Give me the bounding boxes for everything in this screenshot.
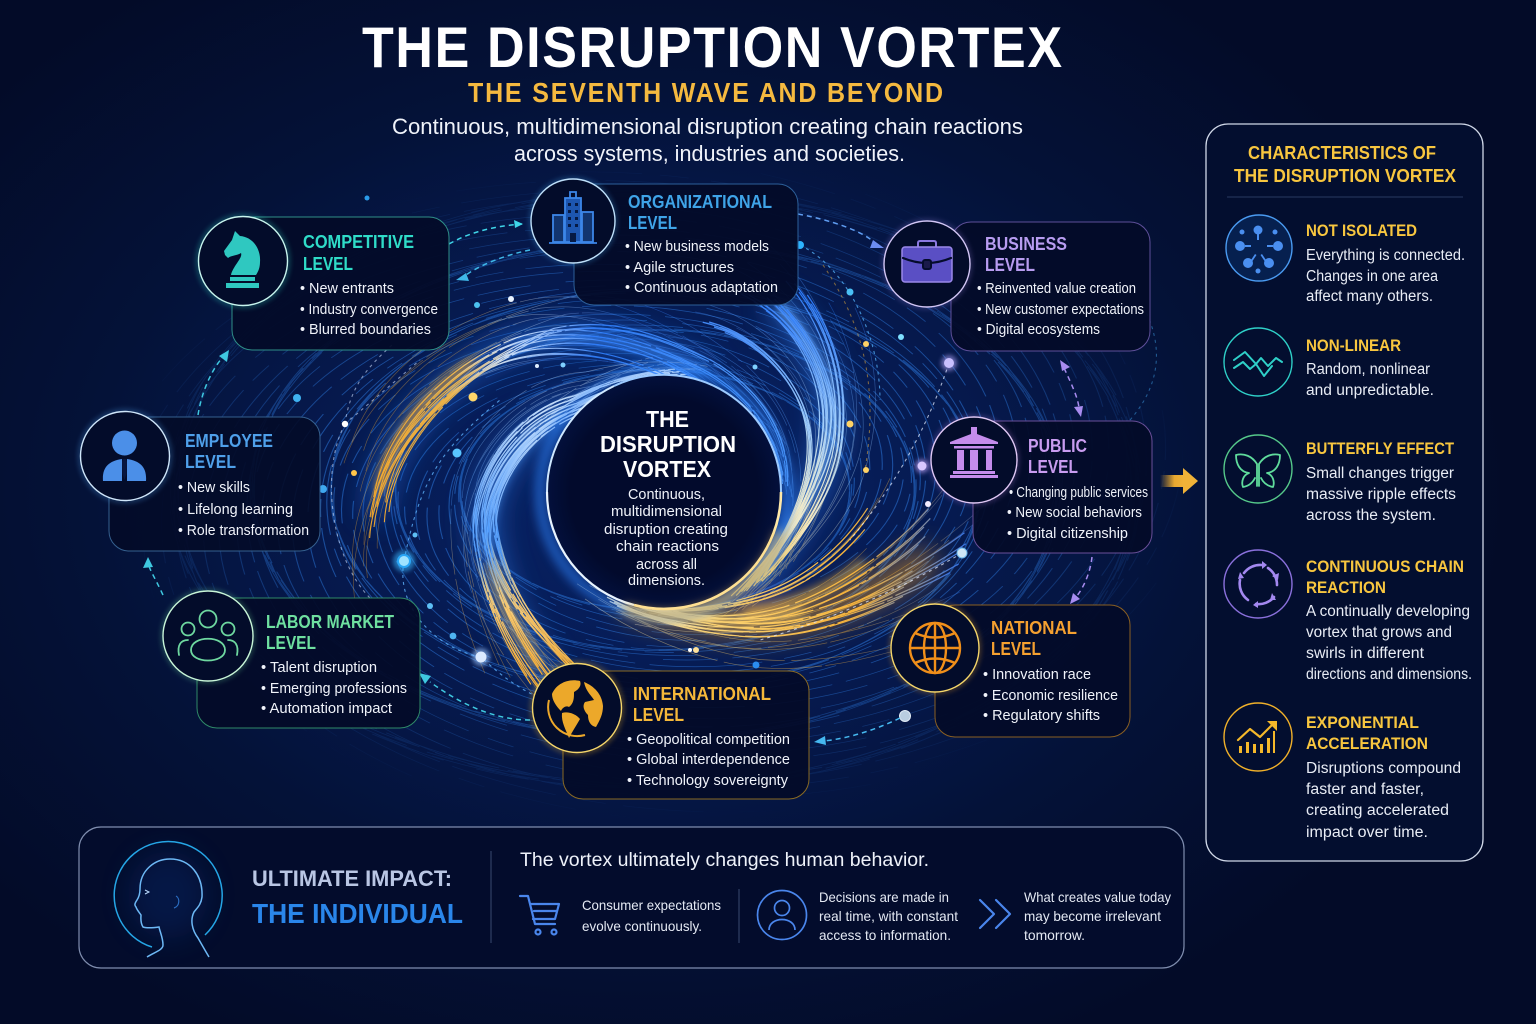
panel: public level: • Digital citizenship — [1007, 526, 1128, 542]
vortex centre text — [600, 406, 736, 589]
nodes — [293, 196, 967, 722]
panel: international level: INTERNATIONAL — [633, 684, 771, 704]
panel: public level: • New social behaviors — [1007, 505, 1142, 521]
subtitle: THE SEVENTH WAVE AND BEYOND — [468, 77, 943, 108]
panel: national level: LEVEL — [991, 639, 1041, 659]
panel: business level: • Reinvented value creation — [977, 281, 1136, 297]
panel: public level — [928, 414, 1152, 553]
panel: organizational level: • Agile structures — [625, 260, 734, 276]
item: continuous chain reaction: swirls in different — [1306, 645, 1425, 662]
impact: consumer expectations: evolve continuously. — [582, 918, 702, 934]
item: not isolated: affect many others. — [1306, 288, 1433, 305]
vortex swirl — [160, 173, 1168, 807]
item: exponential acceleration: creating accelerated — [1306, 802, 1449, 819]
vortex centre text: chain reactions — [616, 539, 719, 555]
panel: business level: • New customer expectations — [977, 302, 1144, 318]
panel: employee level: • Role transformation — [178, 523, 309, 539]
panel: competitive level — [195, 213, 449, 350]
icon: chess knight — [224, 231, 260, 288]
item: butterfly effect: BUTTERFLY EFFECT — [1306, 440, 1454, 458]
panel: public level: LEVEL — [1028, 457, 1078, 477]
vortex centre text: DISRUPTION — [600, 431, 736, 457]
panel: competitive level: LEVEL — [303, 254, 353, 274]
panel: national level: • Regulatory shifts — [983, 708, 1100, 724]
vortex centre text: multidimensional — [611, 504, 722, 520]
panel: national level: NATIONAL — [991, 618, 1077, 638]
impact: value: tomorrow. — [1024, 927, 1085, 943]
item: continuous chain reaction: A continually developing — [1306, 603, 1470, 620]
impact: value — [980, 889, 1171, 943]
panel: organizational level: ORGANIZATIONAL — [628, 192, 772, 212]
ultimate impact label: THE INDIVIDUAL — [252, 898, 463, 929]
item: butterfly effect: massive ripple effects — [1306, 486, 1456, 503]
icon: briefcase — [902, 241, 952, 282]
panel: organizational level — [528, 176, 798, 305]
vortex centre text: across all — [636, 557, 697, 573]
vortex centre text: disruption creating — [604, 522, 728, 538]
item: continuous chain reaction: directions and dimensions. — [1306, 666, 1472, 683]
panel: international level: • Geopolitical competition — [627, 732, 790, 748]
item: exponential acceleration — [1224, 703, 1461, 841]
item: exponential acceleration: ACCELERATION — [1306, 735, 1428, 753]
panel: labor market level: LABOR MARKET — [266, 612, 394, 632]
vortex centre text: Continuous, — [628, 487, 705, 503]
item: butterfly effect: across the system. — [1306, 507, 1436, 524]
panel: employee level: • Lifelong learning — [178, 502, 293, 518]
item: exponential acceleration: impact over time. — [1306, 824, 1428, 841]
panel: labor market level: LEVEL — [266, 633, 316, 653]
panel: labor market level: • Talent disruption — [261, 660, 377, 676]
characteristics heading: CHARACTERISTICS OF — [1248, 142, 1436, 163]
panel: business level — [881, 218, 1150, 351]
panel: labor market level: • Emerging professions — [261, 681, 407, 697]
impact: decisions: access to information. — [819, 927, 951, 943]
item: continuous chain reaction: CONTINUOUS CHAIN — [1306, 558, 1464, 576]
item: non-linear: NON-LINEAR — [1306, 337, 1401, 355]
icon: employee — [103, 430, 146, 481]
panel: competitive level: • Blurred boundaries — [300, 322, 431, 338]
panel: organizational level: LEVEL — [628, 213, 677, 233]
item: exponential acceleration: Disruptions compound — [1306, 760, 1461, 777]
bright strand fans — [700, 278, 851, 603]
faint spiral streaks — [160, 173, 1168, 807]
vortex centre text: dimensions. — [628, 573, 705, 589]
icon: earth — [548, 680, 603, 738]
panel: international level: • Technology sovereignty — [627, 773, 789, 789]
item: butterfly effect: Small changes trigger — [1306, 465, 1454, 482]
wide dim strand fans — [672, 232, 898, 640]
impact: decisions: real time, with constant — [819, 908, 958, 924]
impact: decisions: Decisions are made in — [819, 889, 949, 905]
connector arrows — [143, 214, 1092, 745]
panel: national level — [888, 601, 1130, 737]
impact: consumer expectations: Consumer expectations — [582, 897, 721, 913]
panel: business level: LEVEL — [985, 255, 1035, 275]
panel: employee level: • New skills — [178, 480, 250, 496]
title: THE DISRUPTION VORTEX — [362, 14, 1062, 80]
item: continuous chain reaction — [1224, 550, 1472, 683]
icon: public building — [950, 427, 998, 478]
characteristics heading — [1234, 142, 1457, 186]
impact statement: The vortex ultimately changes human behavior. — [520, 850, 929, 871]
item: not isolated: Everything is connected. — [1306, 247, 1465, 264]
panel: labor market level — [160, 588, 420, 728]
description: Continuous, multidimensional disruption creating chain reactions — [392, 114, 1023, 139]
panel: characteristics — [1206, 124, 1483, 861]
ultimate impact label: ULTIMATE IMPACT: — [252, 866, 452, 891]
icon: buildings — [549, 192, 597, 243]
icon: globe — [910, 623, 960, 673]
item: not isolated — [1226, 215, 1465, 305]
impact: decisions — [758, 889, 958, 943]
panel: national level: • Economic resilience — [983, 688, 1118, 704]
item: not isolated: Changes in one area — [1306, 268, 1438, 285]
panel: organizational level: • New business models — [625, 239, 769, 255]
panel: employee level: EMPLOYEE — [185, 431, 273, 451]
item: continuous chain reaction: REACTION — [1306, 579, 1386, 597]
panel: competitive level: • Industry convergence — [300, 302, 438, 318]
panel: ultimate impact — [79, 827, 1184, 968]
panel: business level: BUSINESS — [985, 234, 1067, 254]
characteristics heading: THE DISRUPTION VORTEX — [1234, 165, 1457, 186]
description: across systems, industries and societies. — [514, 141, 905, 166]
description — [392, 114, 1023, 166]
soft glow of arms — [377, 307, 924, 677]
panel: public level: PUBLIC — [1028, 436, 1087, 456]
arrow heads — [143, 220, 1083, 745]
hole ring — [540, 368, 788, 616]
item: exponential acceleration: faster and faster, — [1306, 781, 1424, 798]
orbit paths — [331, 245, 1156, 700]
panel: employee level: LEVEL — [185, 452, 236, 472]
vortex centre text: VORTEX — [623, 456, 712, 482]
item: non-linear: and unpredictable. — [1306, 382, 1434, 399]
arrow: to characteristics — [1160, 468, 1198, 494]
panel: labor market level: • Automation impact — [261, 701, 392, 717]
item: not isolated: NOT ISOLATED — [1306, 222, 1417, 240]
panel: competitive level: • New entrants — [300, 281, 394, 297]
icon: head — [114, 841, 222, 957]
panel: competitive level: COMPETITIVE — [303, 232, 414, 252]
ultimate impact label — [252, 866, 463, 929]
impact: value: may become irrelevant — [1024, 908, 1161, 924]
item: non-linear — [1224, 328, 1434, 399]
icon: people — [178, 610, 238, 660]
impact: consumer expectations — [520, 896, 721, 934]
panel: international level: • Global interdependence — [627, 752, 790, 768]
panel: business level: • Digital ecosystems — [977, 322, 1100, 338]
item: butterfly effect — [1224, 435, 1456, 524]
panel: employee level — [77, 408, 320, 551]
panel: international level: LEVEL — [633, 705, 684, 725]
panel: public level: • Changing public services — [1009, 485, 1148, 501]
item: continuous chain reaction: vortex that grows and — [1306, 624, 1452, 641]
panel: international level — [529, 660, 809, 799]
vortex centre text: THE — [646, 406, 689, 432]
item: exponential acceleration: EXPONENTIAL — [1306, 714, 1419, 732]
item: non-linear: Random, nonlinear — [1306, 361, 1430, 378]
panel: organizational level: • Continuous adaptation — [625, 280, 778, 296]
panel: national level: • Innovation race — [983, 667, 1091, 683]
impact: value: What creates value today — [1024, 889, 1171, 905]
